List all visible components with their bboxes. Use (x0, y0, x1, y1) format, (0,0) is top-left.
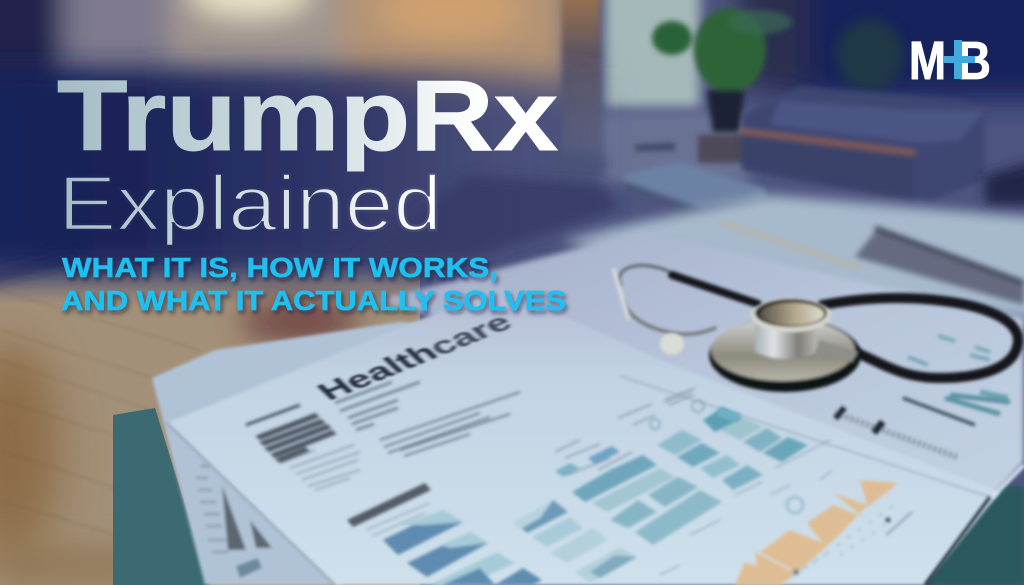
window column (562, 0, 600, 165)
logo: M+B: B (958, 31, 991, 91)
subtitle (61, 252, 566, 316)
subtitle: WHAT IT IS, HOW IT WORKS, (62, 252, 498, 283)
back paper (152, 322, 480, 585)
laptop (0, 175, 622, 286)
logo: M+B (909, 31, 991, 91)
navy overlay (0, 68, 620, 268)
potted plant (652, 8, 792, 163)
orange bar chart (660, 440, 912, 585)
teal folder (113, 408, 1024, 585)
teal chart grid (555, 388, 808, 545)
main paper with report (167, 287, 1024, 585)
stethoscope (614, 265, 1018, 392)
title: TrumpRx: TrumpRx (57, 60, 558, 172)
upper paper chart bars (664, 336, 1010, 457)
clipboard and pen (720, 222, 1024, 305)
wooden table (0, 255, 420, 585)
upper paper (380, 232, 1024, 500)
chest piece (709, 298, 861, 392)
desk books (622, 86, 985, 222)
eartip ball (660, 333, 684, 355)
report heading: Healthcare (311, 308, 519, 405)
tubing and ear loop (614, 265, 1018, 378)
window wall (0, 0, 1024, 120)
logo: M+B: M (909, 31, 946, 91)
area charts (347, 483, 637, 585)
report text lines (246, 382, 520, 490)
pale desk right (560, 195, 1024, 320)
title: Explained: Explained (58, 159, 442, 247)
subtitle: AND WHAT IT ACTUALLY SOLVES (61, 285, 566, 316)
dark table block (255, 413, 337, 463)
